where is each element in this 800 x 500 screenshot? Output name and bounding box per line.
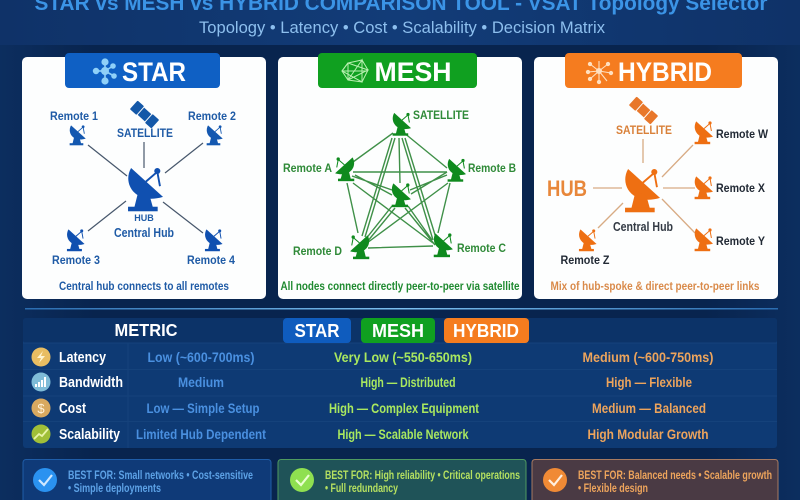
row: cost: High — Complex Equipment [329, 400, 479, 416]
node: remote d: Remote D [293, 244, 342, 258]
icon: satellite [130, 100, 159, 129]
row: bandwidth [32, 372, 692, 392]
mesh caption: All nodes connect directly peer-to-peer via satellite [280, 281, 520, 293]
icon: trend [32, 424, 50, 444]
star pill [283, 318, 351, 343]
hybrid tab [565, 53, 742, 88]
remote y: Remote Y [716, 234, 765, 248]
node: remote c: Remote C [457, 241, 506, 255]
label: hybrid satellite: SATELLITE [616, 123, 672, 137]
row: scalability: High Modular Growth [588, 426, 708, 442]
central hub label: Central Hub [114, 225, 174, 240]
icon: star network [94, 59, 116, 84]
icon: hybrid check [543, 468, 567, 492]
header band [0, 0, 800, 45]
central hub label: Central Hub [613, 219, 673, 234]
row: scalability: Scalability [59, 426, 121, 443]
row: bandwidth: Medium [178, 374, 224, 390]
remote 1: Remote 1 [50, 109, 98, 123]
remote 2 [188, 109, 236, 145]
hybrid pill [444, 318, 529, 343]
star tab: STAR [122, 57, 186, 87]
callout: star best for: BEST FOR: Small networks • Cost-sensitive [68, 470, 253, 482]
label: satellite: SATELLITE [117, 126, 173, 140]
row: latency: Medium (~600-750ms) [582, 349, 714, 365]
mesh pill: MESH [372, 321, 424, 341]
remote 1 [50, 109, 98, 145]
node: satellite [393, 110, 469, 136]
remote 3: Remote 3 [52, 253, 100, 267]
remote x: Remote X [716, 181, 765, 195]
icon: dollar [32, 398, 50, 418]
callout: star best for: • Simple deployments [68, 483, 161, 495]
star caption: Central hub connects to all remotes [59, 281, 229, 293]
row: scalability: Limited Hub Dependent [136, 426, 266, 442]
remote y [695, 228, 765, 251]
hybrid pill: HYBRID [453, 321, 519, 341]
hybrid hub dish [625, 169, 660, 212]
icon: lightning [32, 348, 50, 366]
hub label: HUB [134, 213, 154, 223]
hybrid links [593, 139, 695, 233]
callout: mesh best for: • Full redundancy [325, 483, 398, 495]
panel: star [22, 53, 266, 299]
remote z [560, 229, 610, 267]
row: latency [32, 348, 714, 366]
callout: hybrid best for [532, 460, 778, 500]
star pill: STAR [294, 321, 340, 341]
remote 2: Remote 2 [188, 109, 236, 123]
row: bandwidth: High — Flexible [606, 374, 692, 390]
row: cost: Low — Simple Setup [146, 400, 260, 416]
panel: comparison table [23, 318, 777, 448]
hybrid caption: Mix of hub-spoke & direct peer-to-peer links [550, 281, 760, 293]
star tab [65, 53, 220, 88]
node: remote a [283, 157, 354, 181]
label: hub: HUB [547, 176, 587, 201]
row: latency: Very Low (~550-650ms) [334, 349, 472, 365]
callout: hybrid best for: • Flexible design [578, 483, 648, 495]
row: bandwidth: High — Distributed [360, 374, 456, 390]
star links [88, 142, 203, 233]
mesh tab: MESH [374, 57, 452, 87]
node: remote b: Remote B [468, 161, 516, 175]
node: remote d [293, 235, 369, 259]
row: scalability: High — Scalable Network [338, 426, 469, 442]
row: latency: Low (~600-700ms) [148, 349, 254, 365]
row: latency: Latency [59, 349, 107, 366]
remote x [695, 176, 765, 199]
mesh pill [361, 318, 435, 343]
row: bandwidth: Bandwidth [59, 374, 123, 391]
row: cost: Cost [59, 400, 86, 417]
callout: star best for [23, 460, 271, 500]
icon: dollar: $ [37, 401, 45, 416]
callout: mesh best for: BEST FOR: High reliability • Critical operations [325, 470, 520, 482]
subtitle: Topology • Latency • Cost • Scalability • Decision Matrix [199, 18, 605, 37]
remote z: Remote Z [560, 253, 610, 267]
hub dish [128, 168, 163, 211]
node: center [392, 183, 411, 207]
hybrid tab: HYBRID [618, 57, 712, 87]
remote 4 [187, 229, 235, 267]
icon: hybrid network [586, 61, 613, 84]
remote 3 [52, 229, 100, 267]
panel: hybrid [534, 53, 778, 299]
icon: mesh wireframe [342, 60, 368, 82]
row: cost [32, 398, 706, 418]
node: satellite: SATELLITE [413, 110, 469, 122]
icon: mesh check [290, 468, 314, 492]
mesh links [347, 132, 450, 248]
icon: bars [32, 372, 50, 392]
icon: star check [33, 468, 57, 492]
panel: mesh [278, 53, 522, 299]
node: remote c [434, 233, 506, 257]
remote w: Remote W [716, 127, 769, 141]
row: cost: Medium — Balanced [592, 400, 706, 416]
callout: mesh best for [278, 460, 526, 500]
metric heading: METRIC [114, 320, 178, 340]
remote 4: Remote 4 [187, 253, 235, 267]
remote w [695, 121, 769, 144]
node: remote a: Remote A [283, 161, 332, 175]
row: scalability [32, 424, 708, 444]
node: remote b [448, 159, 516, 182]
mesh tab [318, 53, 477, 88]
icon: hybrid satellite [629, 96, 658, 125]
